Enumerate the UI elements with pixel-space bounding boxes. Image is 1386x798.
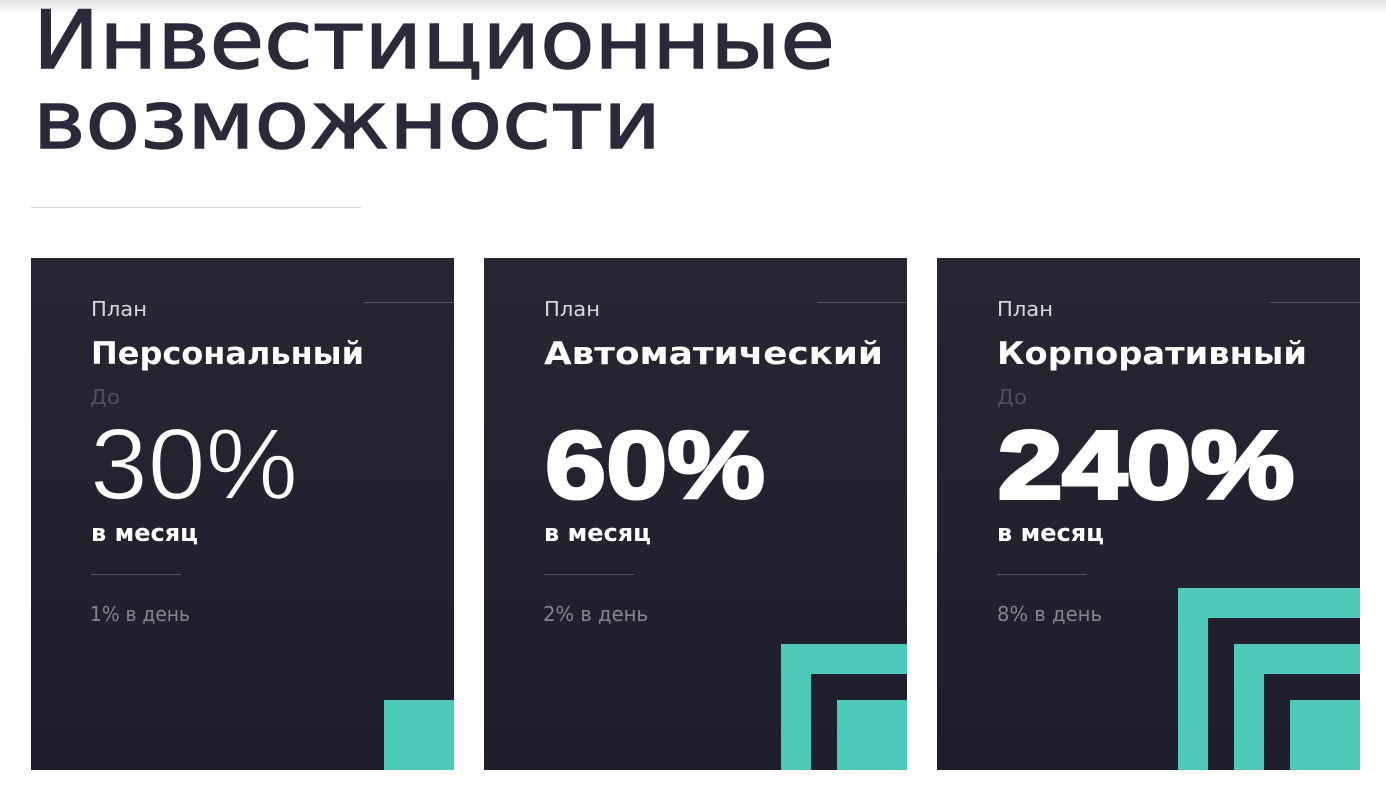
- up to label: До: [90, 385, 120, 409]
- icon: teal square: [384, 700, 454, 770]
- plan label: План: [544, 297, 600, 321]
- title: возможности: [33, 74, 661, 167]
- per month label: в месяц: [997, 519, 1104, 547]
- title: [33, 0, 835, 167]
- rate: 240%: 240%: [998, 412, 1294, 519]
- rate: 30%: 30%: [90, 409, 298, 521]
- rate: 60%: 60%: [545, 412, 765, 519]
- daily rate: 2% в день: [543, 602, 648, 626]
- panel: personal plan: [31, 258, 454, 770]
- icon: teal nested corners: [781, 644, 907, 770]
- plan name: Автоматический: [544, 336, 883, 372]
- plan label: План: [997, 297, 1053, 321]
- daily rate: 1% в день: [90, 602, 190, 626]
- plan name: Корпоративный: [997, 336, 1307, 372]
- plan name: Персональный: [91, 336, 364, 372]
- per month label: в месяц: [91, 519, 198, 547]
- plan label: План: [91, 297, 147, 321]
- daily rate: 8% в день: [997, 602, 1102, 626]
- panel: automatic plan: [484, 258, 907, 770]
- icon: teal nested corners: [1178, 588, 1360, 770]
- panel: corporate plan: [937, 258, 1360, 770]
- per month label: в месяц: [544, 519, 651, 547]
- up to label: До: [997, 385, 1027, 409]
